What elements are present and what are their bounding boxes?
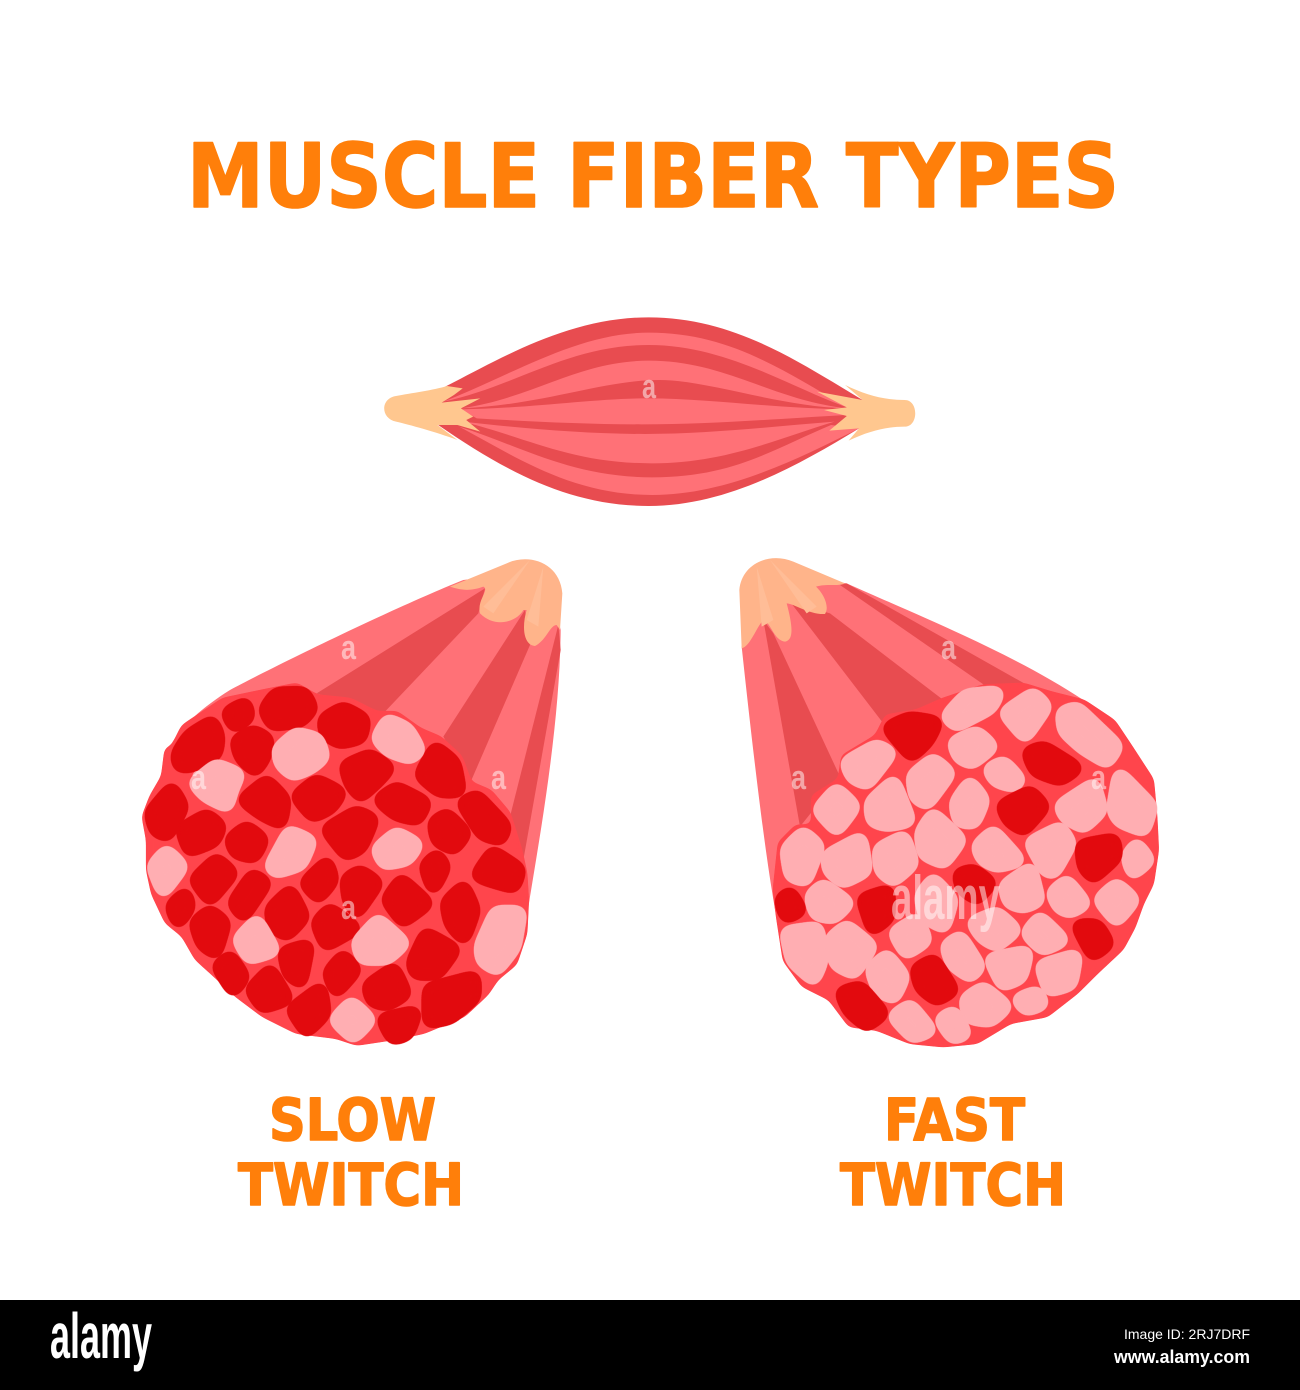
cross section bbox=[144, 685, 527, 1043]
stock watermarks: a bbox=[1091, 759, 1107, 797]
cone stripes bbox=[763, 583, 1030, 827]
stock watermarks: a bbox=[941, 629, 957, 667]
bundle cone bbox=[742, 570, 1113, 1017]
label: slow twitch: SLOW bbox=[269, 1086, 436, 1154]
dark slow fibers bbox=[152, 694, 518, 1037]
title: MUSCLE FIBER TYPES bbox=[187, 125, 1119, 228]
tendon rays bbox=[757, 560, 817, 627]
label: fast twitch: FAST bbox=[884, 1086, 1025, 1154]
cone stripes bbox=[317, 588, 561, 860]
stock watermarks: alamy bbox=[891, 864, 1000, 933]
tendon bbox=[450, 559, 562, 646]
stock watermarks: a bbox=[791, 759, 807, 797]
bundle cone bbox=[163, 570, 561, 1017]
stock watermarks: a bbox=[341, 629, 357, 667]
illustration: whole muscle bbox=[384, 317, 915, 506]
stock watermarks: a bbox=[491, 759, 507, 797]
label: slow twitch: TWITCH bbox=[238, 1151, 464, 1219]
image id: Image ID: 2RJ7DRF bbox=[1124, 1326, 1250, 1342]
panel: slow twitch bundle bbox=[144, 559, 562, 1043]
stock watermarks: a bbox=[341, 889, 357, 927]
pale fast fibers bbox=[788, 694, 1150, 1037]
tendon rays bbox=[483, 560, 543, 627]
website: www.alamy.com bbox=[1113, 1347, 1250, 1367]
stock watermarks: a bbox=[191, 759, 207, 797]
stock watermarks: a bbox=[642, 368, 657, 406]
label: slow twitch bbox=[238, 1086, 464, 1219]
label: fast twitch bbox=[840, 1086, 1066, 1219]
tendon bbox=[739, 558, 845, 648]
footer bar bbox=[0, 1300, 1300, 1390]
pale slow fibers bbox=[154, 722, 519, 1036]
cross section bbox=[775, 685, 1157, 1045]
dark fast fibers bbox=[782, 719, 1115, 1024]
footer logo: alamy bbox=[50, 1300, 152, 1372]
stock watermarks bbox=[191, 368, 1107, 933]
panel: fast twitch bundle bbox=[739, 558, 1157, 1045]
label: fast twitch: TWITCH bbox=[840, 1151, 1066, 1219]
